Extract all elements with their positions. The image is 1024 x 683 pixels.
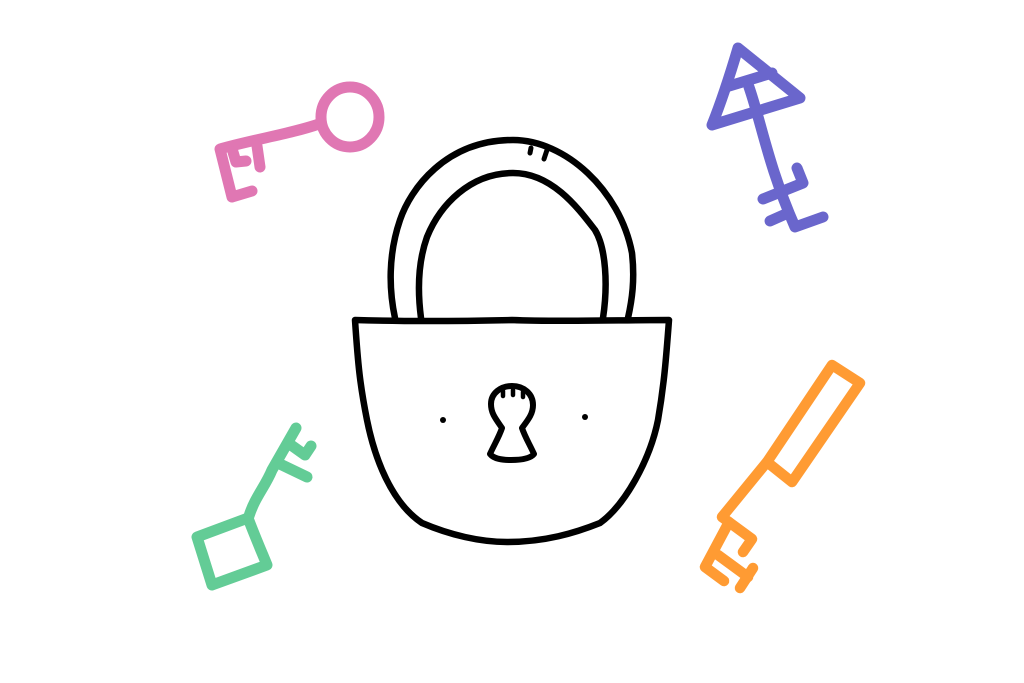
right rivet — [582, 414, 588, 420]
orange key — [705, 365, 860, 588]
left rivet — [440, 417, 446, 423]
purple key — [712, 48, 823, 227]
keyhole — [490, 386, 534, 460]
padlock — [355, 140, 669, 542]
padlock body — [355, 320, 669, 542]
green key — [197, 428, 311, 585]
pink key — [220, 87, 379, 197]
padlock shackle — [391, 140, 633, 318]
